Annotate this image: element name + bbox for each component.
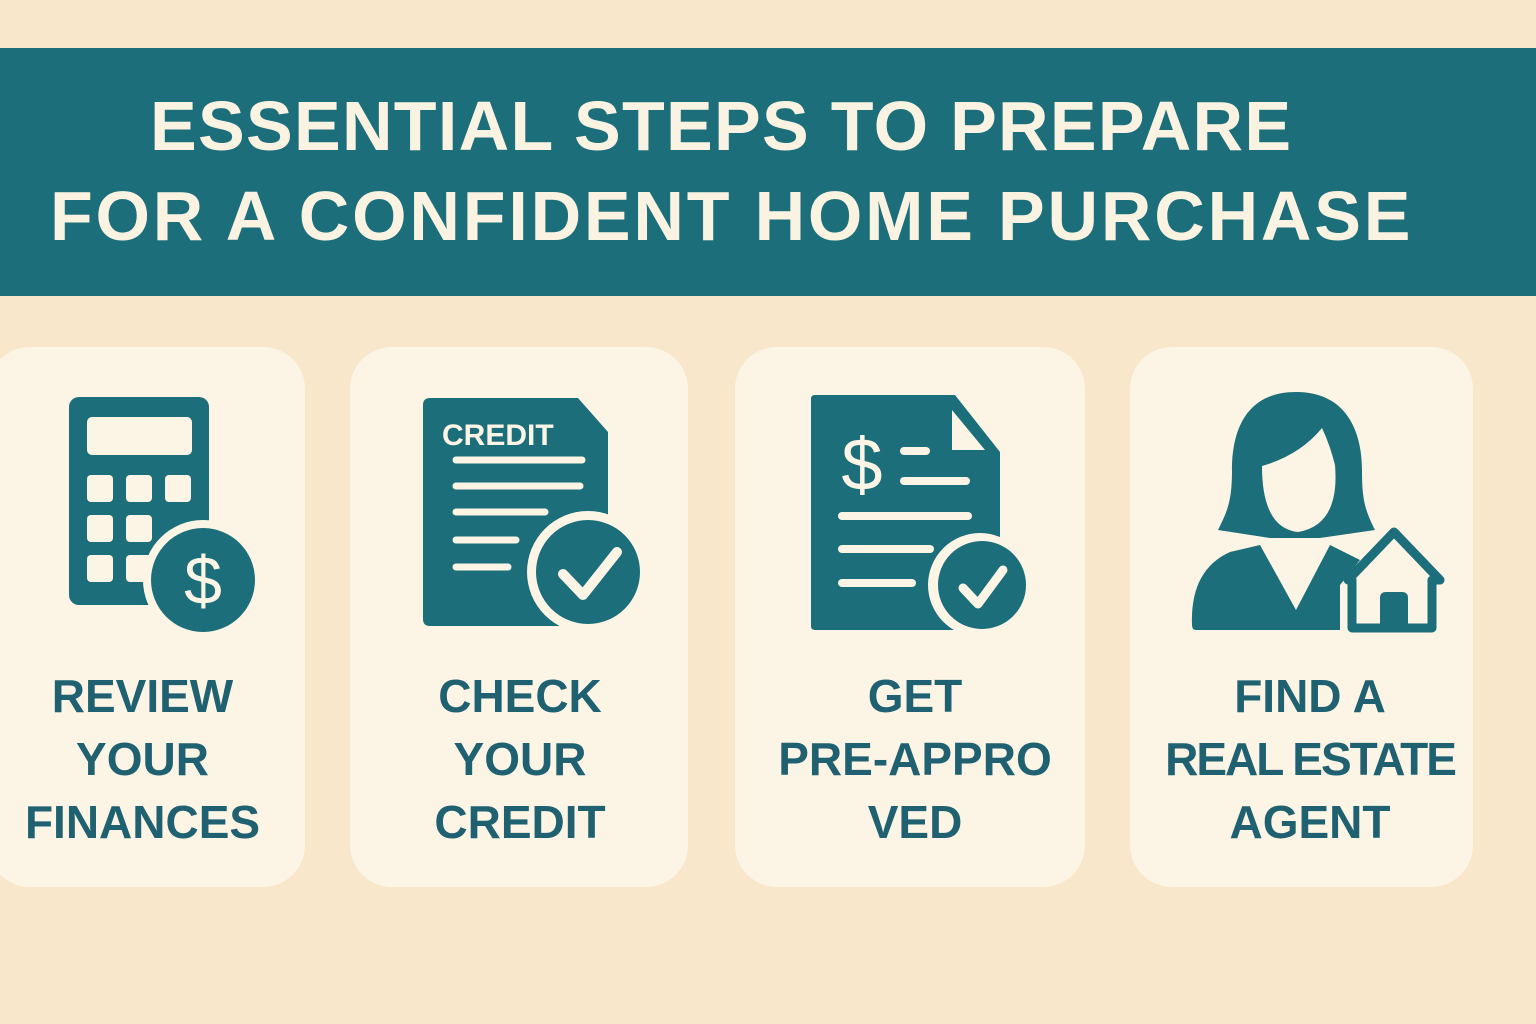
- label 3: [778, 670, 1052, 848]
- label 2: YOUR: [454, 733, 586, 785]
- label 1: YOUR: [76, 733, 209, 785]
- label 2: [434, 670, 606, 848]
- label 2: CHECK: [438, 670, 602, 722]
- title line 1: ESSENTIAL STEPS TO PREPARE: [150, 87, 1292, 165]
- label 3: GET: [868, 670, 962, 722]
- label 4: FIND A: [1234, 670, 1386, 722]
- label 4: REAL ESTATE: [1165, 733, 1455, 785]
- icon: calculator with dollar coin: [69, 397, 263, 640]
- label 4: AGENT: [1230, 796, 1390, 848]
- icon: real estate agent with house: [1192, 392, 1440, 630]
- label 1: [25, 670, 260, 848]
- card 1: [0, 347, 305, 887]
- label 4: [1165, 670, 1456, 848]
- icon: credit report with check: [423, 398, 649, 633]
- label 3: PRE-APPRO: [778, 733, 1052, 785]
- card 3: [735, 347, 1085, 887]
- label 3: VED: [868, 796, 962, 848]
- icon: credit report with check: CREDIT: [442, 419, 554, 452]
- card 2: [350, 347, 688, 887]
- label 2: CREDIT: [434, 796, 606, 848]
- title line 2: FOR A CONFIDENT HOME PURCHASE: [50, 177, 1413, 255]
- icon: pre-approval document: $: [841, 423, 883, 506]
- title banner: [0, 48, 1536, 296]
- icon: pre-approval document: [811, 395, 1032, 637]
- label 1: REVIEW: [52, 670, 233, 722]
- label 1: FINANCES: [25, 796, 260, 848]
- card 4: [1130, 347, 1473, 887]
- icon: calculator with dollar coin: $: [184, 543, 222, 619]
